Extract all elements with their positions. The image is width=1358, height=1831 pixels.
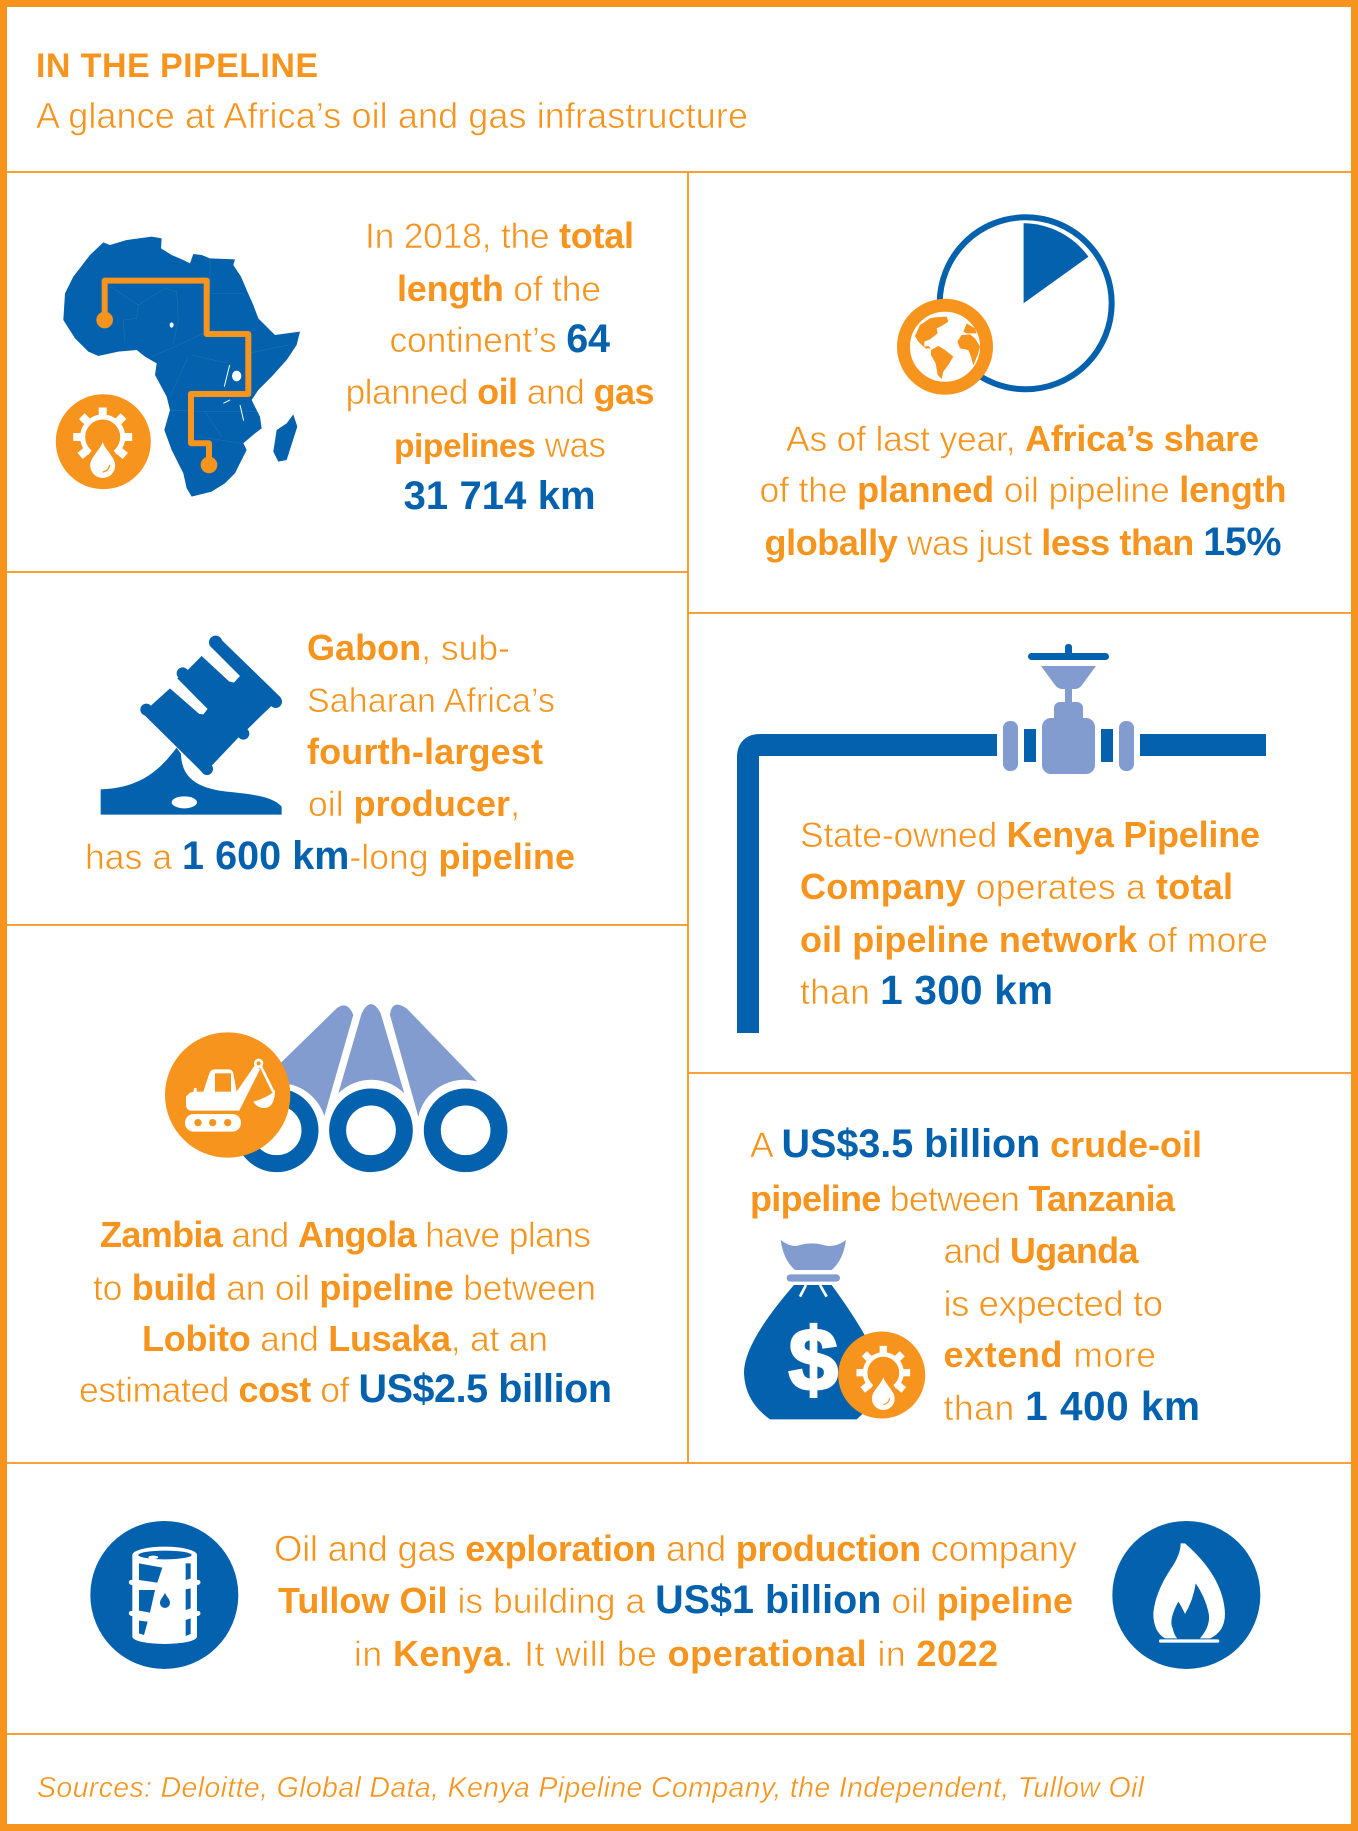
text: Gabon pipeline: oil producer, [308, 783, 520, 824]
text: share of planned length: of the planned oil pipeline length [760, 469, 1286, 510]
text: Tullow Oil pipeline: Tullow Oil is building a US$1 billion oil pipeline [278, 1578, 1073, 1622]
header [36, 47, 748, 136]
text: US$3.5 billion pipeline: A US$3.5 billion crude-oil [750, 1122, 1202, 1166]
text: share of planned length: globally was just less than 15% [764, 520, 1282, 564]
text: share of planned length [760, 418, 1286, 564]
text: Lobito Lusaka pipeline [79, 1214, 612, 1411]
panel: Tullow Oil [90, 1521, 1260, 1674]
icon: oil barrel [90, 1521, 238, 1669]
text: total length: In 2018, the total [365, 215, 634, 256]
icon: Africa map with pipeline [63, 237, 300, 497]
title: IN THE PIPELINE [36, 47, 318, 85]
panel: Africa's share [760, 217, 1286, 564]
panel: Zambia and Angola [79, 1004, 612, 1411]
text: total length: pipelines was [394, 426, 606, 465]
text: total length: continent’s 64 [390, 317, 610, 361]
chart: pie showing less than 15% [940, 217, 1112, 389]
text: Kenya Pipeline Company [800, 814, 1268, 1013]
text: US$3.5 billion pipeline: and Uganda [944, 1230, 1139, 1271]
text: Lobito Lusaka pipeline: Zambia and Angola have plans [100, 1214, 591, 1255]
icon: pipes and excavator [165, 1004, 499, 1164]
icon: spilling oil drum [101, 636, 282, 815]
text: share of planned length: As of last year, Africa’s share [786, 418, 1259, 459]
text: total length: 31 714 km [404, 474, 596, 518]
text: US$3.5 billion pipeline: than 1 400 km [944, 1383, 1200, 1429]
text: Gabon pipeline: has a 1 600 km-long pipeline [85, 834, 575, 878]
text: Kenya Pipeline Company: than 1 300 km [800, 967, 1053, 1013]
text: US$3.5 billion pipeline: pipeline between Tanzania [750, 1178, 1176, 1219]
sources: Sources: Deloitte, Global Data, Kenya Pipeline Company, the Independent, Tullow Oil [37, 1772, 1145, 1804]
text: Gabon pipeline [85, 627, 575, 878]
text: Tullow Oil pipeline: Oil and gas exploration and production company [274, 1528, 1078, 1569]
panel: Kenya Pipeline Company [748, 644, 1268, 1033]
text: Tullow Oil pipeline: in Kenya. It will be operational in 2022 [354, 1633, 998, 1674]
text: total length: length of the [397, 268, 601, 309]
text: Kenya Pipeline Company: Company operates a total [800, 866, 1233, 907]
panel: continent pipelines [56, 215, 655, 518]
text: US$3.5 billion pipeline [750, 1122, 1202, 1429]
text: Tullow Oil pipeline [274, 1528, 1078, 1674]
icon: gas flame [1112, 1521, 1260, 1669]
subtitle: A glance at Africa’s oil and gas infrastructure [36, 95, 748, 136]
panel: Tanzania Uganda pipeline [744, 1122, 1202, 1429]
dollar sign: $ [789, 1310, 838, 1409]
icon: money bag with gear [744, 1240, 925, 1419]
text: US$3.5 billion pipeline: extend more [944, 1334, 1156, 1375]
text: total length: planned oil and gas [346, 371, 654, 412]
text: Lobito Lusaka pipeline: to build an oil pipeline between [93, 1267, 596, 1308]
icon: gear and oil drop [56, 394, 151, 489]
text: Gabon pipeline: Gabon, sub- [307, 627, 510, 668]
text: Gabon pipeline: Saharan Africa’s [307, 682, 555, 720]
text: total length [346, 215, 654, 518]
text: Kenya Pipeline Company: State-owned Kenya Pipeline [800, 814, 1260, 855]
icon: pipe with valve [748, 644, 1266, 1033]
text: Lobito Lusaka pipeline: estimated cost of US$2.5 billion [79, 1367, 612, 1411]
text: US$3.5 billion pipeline: is expected to [944, 1283, 1163, 1324]
text: Gabon pipeline: fourth-largest [307, 731, 543, 772]
text: Lobito Lusaka pipeline: Lobito and Lusaka, at an [142, 1318, 548, 1359]
panel: Gabon [85, 627, 575, 878]
text: Kenya Pipeline Company: oil pipeline network of more [800, 919, 1268, 960]
icon: globe [904, 305, 986, 388]
